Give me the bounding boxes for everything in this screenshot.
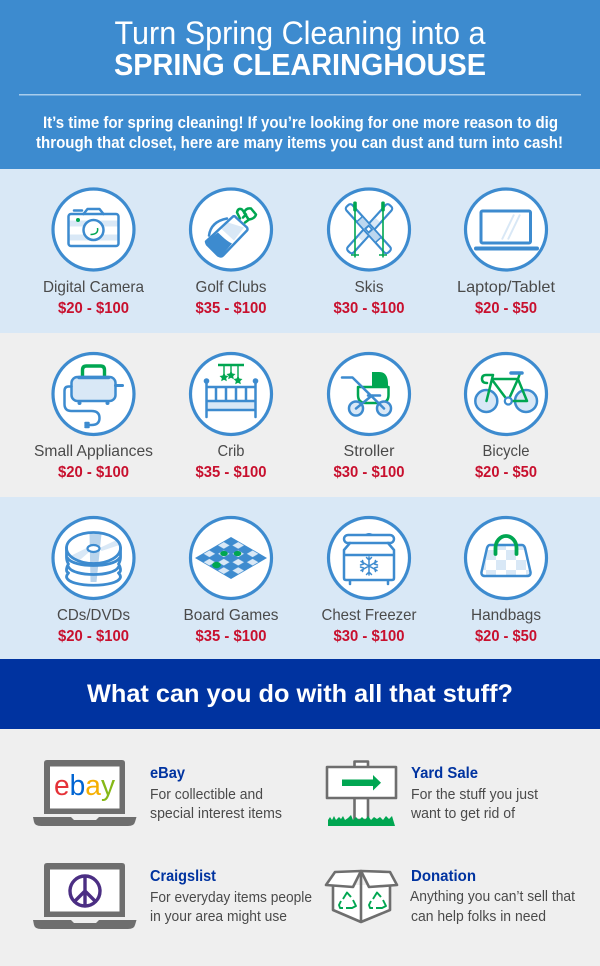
item: cds and dvds: $20 - $100 [58,628,129,645]
icon: laptop with peace sign [33,863,136,929]
option: craigslist: Craigslist [150,868,217,885]
option: ebay [33,760,282,826]
item: small appliances [34,354,153,481]
item: small appliances: Small Appliances [34,443,153,460]
option: donation [326,868,576,925]
option: yard sale: Yard Sale [411,765,478,782]
item: handbags: $20 - $50 [475,628,537,645]
item: digital camera: $20 - $100 [58,300,129,317]
panel: items row 3 [0,497,600,659]
icon: laptop with ebay logo: ebay [54,770,115,802]
option: yard sale [327,762,539,826]
item: digital camera: Digital Camera [43,279,144,296]
option: craigslist: in your area might use [150,908,287,925]
item: cds and dvds [53,518,134,645]
item: skis: $30 - $100 [334,300,405,317]
option: craigslist: For everyday items people [150,889,312,906]
item: cds and dvds: CDs/DVDs [57,607,130,624]
item: chest freezer: $30 - $100 [334,628,405,645]
item: board games: $35 - $100 [196,628,267,645]
item: bicycle: Bicycle [482,443,530,460]
panel: items row 1 [0,169,600,333]
panel: items row 2 [0,333,600,497]
item: board games [184,518,278,645]
icon: donation box [326,871,397,922]
title: SPRING CLEARINGHOUSE [114,47,486,82]
title: Turn Spring Cleaning into a [114,15,486,51]
item: handbags [466,518,546,645]
option: ebay: For collectible and [150,786,263,803]
option: donation: Donation [411,868,476,885]
item: skis: Skis [354,279,384,296]
option: ebay: eBay [150,765,185,782]
item: chest freezer: Chest Freezer [322,607,417,624]
item: chest freezer [322,518,417,645]
item: golf clubs: Golf Clubs [196,279,266,296]
item: laptop: Laptop/Tablet [457,279,556,296]
option: donation: Anything you can’t sell that [410,888,576,905]
item: digital camera [43,189,144,317]
item: bicycle [466,354,546,481]
item: crib [190,354,272,481]
panel: options [0,729,600,966]
item: skis [328,189,410,317]
title [114,15,486,82]
option: yard sale: For the stuff you just [411,786,539,803]
icon: laptop with ebay logo [33,760,136,826]
item: board games: Board Games [184,607,278,624]
item: bicycle: $20 - $50 [475,464,537,481]
item: handbags: Handbags [471,607,541,624]
item: crib: $35 - $100 [196,464,267,481]
item: golf clubs [190,189,272,317]
icon: yard sign [327,762,396,826]
item: stroller: $30 - $100 [334,464,405,481]
option: donation: can help folks in need [411,908,546,925]
intro text [36,114,563,152]
banner: what can you do: What can you do with all that stuff? [87,680,513,708]
option: craigslist [33,863,312,929]
option: ebay: special interest items [150,805,282,822]
item: golf clubs: $35 - $100 [196,300,267,317]
option: yard sale: want to get rid of [410,805,516,822]
item: laptop: $20 - $50 [475,300,537,317]
panel: header [0,0,600,169]
item: stroller: Stroller [344,443,395,460]
item: stroller [328,354,410,481]
item: small appliances: $20 - $100 [58,464,129,481]
banner: what can you do [0,659,600,729]
intro text: It’s time for spring cleaning! If you’re looking for one more reason to dig [43,114,558,132]
item: crib: Crib [218,443,245,460]
intro text: through that closet, here are many items you can dust and turn into cash! [36,134,563,152]
item: laptop [457,189,556,317]
